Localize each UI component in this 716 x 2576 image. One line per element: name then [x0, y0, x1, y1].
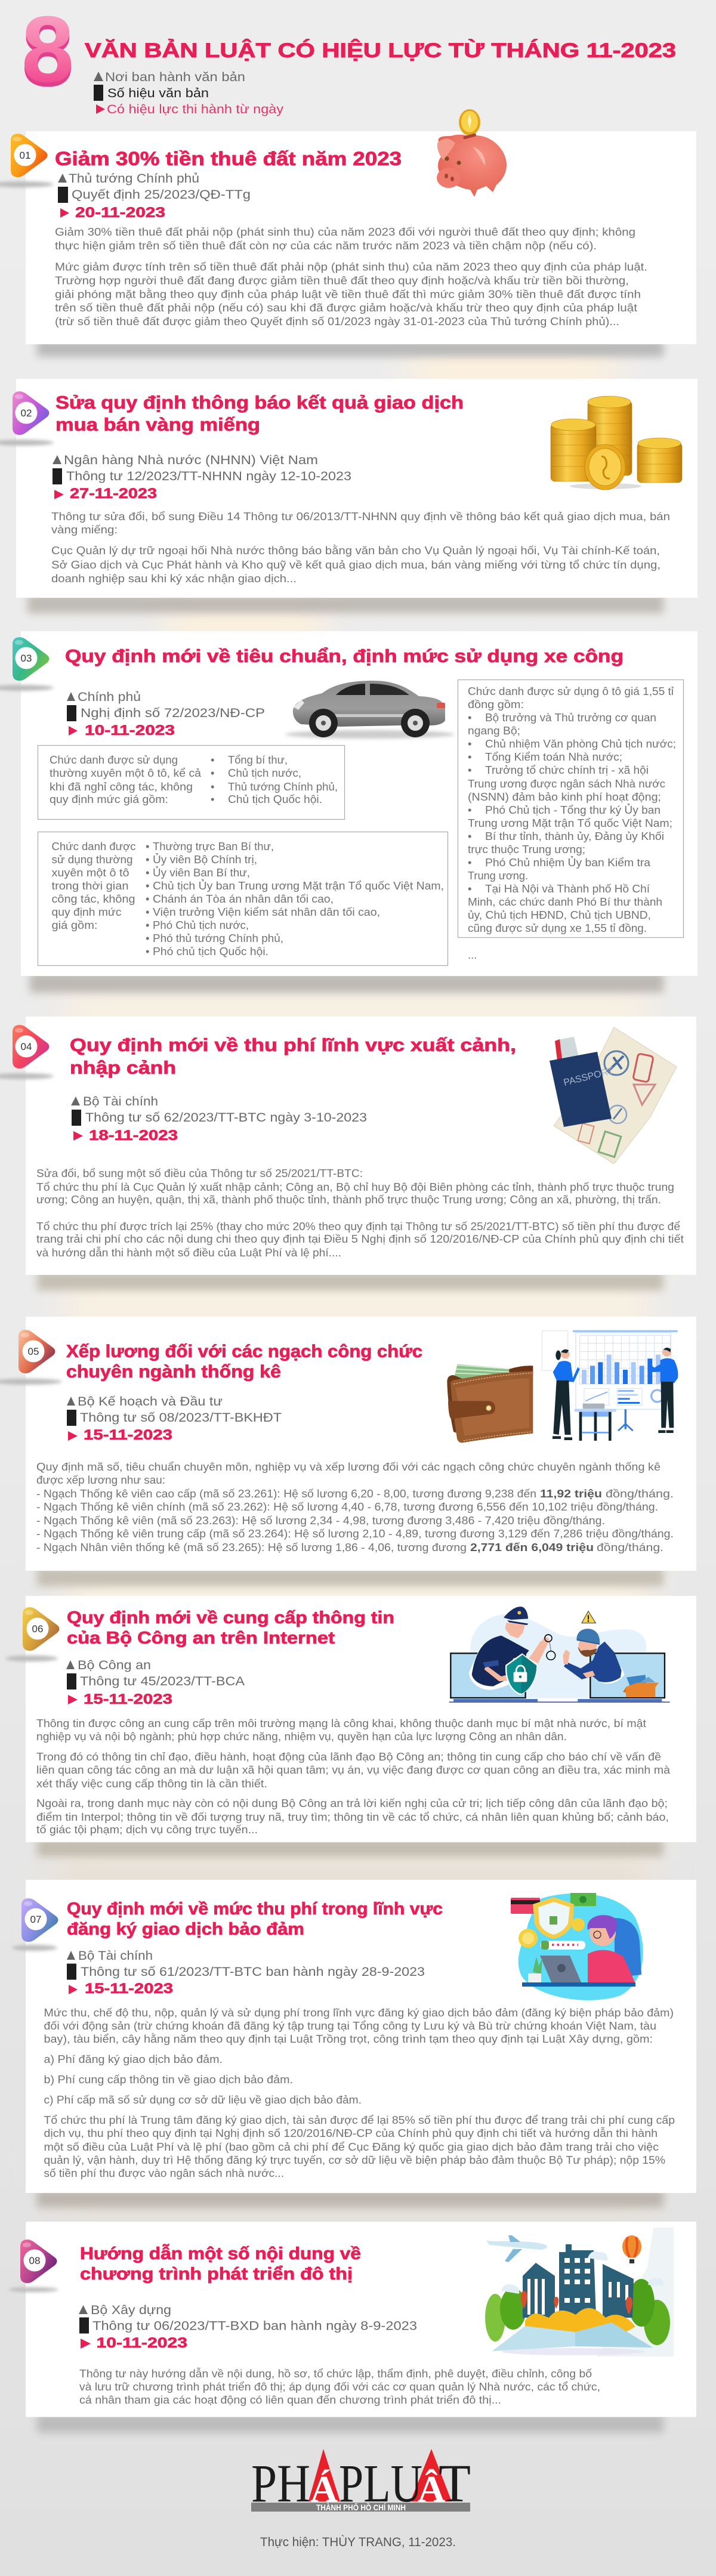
badge 03 [0, 637, 54, 691]
box: chức danh dùng xe 1,55 tỉ: Phó Chủ nhiệm Ủy ban Kiểm tra [485, 856, 651, 869]
box: chức danh không quy định mức giá: • [211, 780, 214, 793]
heading 8: Hướng dẫn một số nội dung về [80, 2243, 361, 2263]
box: chức danh dùng xe 1,55 tỉ: Bí thư tỉnh, thành ủy, Đảng ủy Khối [485, 830, 664, 842]
box: chức danh không quy định mức giá: • [211, 793, 214, 805]
badge 01 [0, 134, 54, 187]
body text 4: Tổ chức thu phí được trích lại 25% (thay cho mức 20% theo quy định tại Thông tư số 25/2021/TT-BTC) số tiền phí thu được để [36, 1221, 680, 1233]
issuer, document number, effective date: Thông tư số 62/2023/TT-BTC ngày 3-10-2023 [85, 1111, 367, 1125]
illustration: data analysts and chart board [542, 1330, 678, 1441]
heading 6: của Bộ Công an trên Internet [67, 1629, 335, 1648]
body text 1: thực hiện giảm trên số tiền thuê đất còn nợ của các năm trước năm 2023 và tiền chậm nộp (nếu có). [55, 240, 597, 252]
box: chức danh không quy định mức giá: Chủ tịch Quốc hội. [228, 793, 322, 805]
body text 4 [36, 1167, 684, 1259]
body text 2: vàng miếng: [51, 524, 118, 536]
panel 6 card [26, 1596, 696, 1842]
panel 2 card [16, 379, 698, 598]
issuer, document number, effective date [67, 690, 265, 739]
issuer, document number, effective date: 15-11-2023 [84, 1691, 172, 1707]
badge 07 [12, 1898, 58, 1951]
box: chức danh trong thời gian công tác: • [146, 932, 149, 944]
issuer, document number, effective date: Ngân hàng Nhà nước (NHNN) Việt Nam [64, 453, 318, 467]
issuer, document number, effective date: Bộ Kế hoạch và Đầu tư [78, 1395, 223, 1409]
box: chức danh trong thời gian công tác: sử dụng thường [51, 853, 132, 866]
body text 7: số tiền phí thu được vào ngân sách nhà nước... [44, 2167, 284, 2179]
icon: passport and stamped pages [550, 1027, 677, 1164]
box: chức danh trong thời gian công tác: • [146, 945, 149, 957]
legend [94, 70, 284, 116]
issuer, document number, effective date [58, 172, 251, 221]
issuer, document number, effective date [66, 1658, 245, 1707]
logo: Pháp Luật TP.HCM: PH [251, 2454, 310, 2513]
body text 1: Giảm 30% tiền thuê đất phải nộp (phát sinh thu) của năm 2023 đối với người thuê đất theo quy định; không [55, 226, 635, 238]
panel 6 shadow [37, 1839, 663, 1857]
panel 8: phát triển đô thị [8, 2222, 696, 2433]
body text 1: trên số tiền thuê đất phải nộp (nếu có) sau khi đã được giảm hoặc/và khấu trừ theo quy định của pháp luật [55, 302, 637, 314]
panel 3 shadow [30, 972, 663, 993]
issuer, document number, effective date: Nghị định số 72/2023/NĐ-CP [81, 706, 265, 720]
box: chức danh trong thời gian công tác: quy định mức [51, 906, 122, 918]
icon: passport and stamped pages: PASSPORT [563, 1066, 615, 1088]
thief [563, 1629, 659, 1697]
icon: gold coin stacks [551, 396, 682, 490]
heading 6 [67, 1608, 394, 1648]
issuer, document number, effective date: 15-11-2023 [85, 1981, 173, 1997]
body text 7 [44, 2007, 675, 2179]
heading 5: Xếp lương đối với các ngạch công chức [66, 1342, 422, 1361]
box: chức danh dùng xe 1,55 tỉ: • [468, 737, 471, 750]
woman figure [553, 1349, 580, 1440]
box: chức danh dùng xe 1,55 tỉ: (NSNN) đảm bảo kinh phí hoạt động; [468, 790, 661, 803]
body text 4: Sửa đổi, bổ sung một số điều của Thông tư số 25/2021/TT-BTC: [36, 1167, 363, 1179]
logo: Pháp Luật TP.HCM: Á [310, 2469, 338, 2510]
body text 7: c) Phí cấp mã số sử dụng cơ sở dữ liệu về giao dịch bảo đảm. [44, 2094, 362, 2106]
badge 07: 07 [30, 1914, 41, 1925]
police officer [469, 1607, 555, 1694]
issuer, document number, effective date [67, 1395, 282, 1443]
box: chức danh dùng xe 1,55 tỉ: đồng gồm: [468, 698, 524, 711]
credit line: Thực hiện: THÙY TRANG, 11-2023. [260, 2535, 456, 2549]
issuer, document number, effective date: Thông tư 45/2023/TT-BCA [80, 1675, 245, 1688]
heading 7 [67, 1899, 443, 1939]
illustration: police officer and thief on laptops [449, 1607, 670, 1703]
heading 4: nhập cảnh [70, 1057, 176, 1078]
box: chức danh không quy định mức giá: quy định mức giá gồm: [50, 793, 168, 805]
heading 7: Quy định mới về mức thu phí trong lĩnh vực [67, 1899, 443, 1919]
body text 7: b) Phí cung cấp thông tin về giao dịch bảo đảm. [44, 2074, 293, 2086]
body text 2 [51, 511, 670, 585]
box: chức danh trong thời gian công tác: Viện trưởng Viện kiểm sát nhân dân tối cao, [153, 906, 380, 918]
illustration: city on a map [485, 2228, 674, 2356]
heading 4 [70, 1034, 516, 1078]
box: chức danh không quy định mức giá: Thủ tướng Chính phủ, [228, 780, 338, 793]
body text 1 [55, 226, 647, 328]
body text 6: xét thấy việc cung cấp thông tin là cần thiết. [36, 1778, 267, 1790]
heading 2: Sửa quy định thông báo kết quả giao dịch [55, 392, 464, 413]
box: chức danh trong thời gian công tác: • [146, 906, 149, 918]
body text 7: Mức thu, chế độ thu, nộp, quản lý và sử dụng phí trong lĩnh vực đăng ký giao dịch bảo đảm (đăng ký biện pháp bảo đảm) [44, 2007, 674, 2019]
body text 6: nghiệp vụ và nội bộ ngành; phù hợp chức năng, nhiệm vụ, quyền hạn của lực lượng Công an nhân dân. [36, 1731, 567, 1743]
body text 5: đồng/tháng. [597, 1542, 663, 1553]
box: chức danh không quy định mức giá: Chủ tịch nước, [228, 767, 301, 779]
main title: VĂN BẢN LUẬT CÓ HIỆU LỰC TỪ THÁNG 11-2023 [85, 39, 676, 62]
heading 3: Quy định mới về tiêu chuẩn, định mức sử dụng xe công [65, 645, 624, 666]
heading 1: Giảm 30% tiền thuê đất năm 2023 [55, 148, 402, 169]
issuer, document number, effective date [53, 453, 351, 502]
body text 7: quản lý, vận hành, duy trì Hệ thống đăng ký trực tuyến, cơ sở dữ liệu về biện pháp bảo đảm thuộc Bộ Tư pháp); nộp 15% [44, 2154, 665, 2166]
heading 2: mua bán vàng miếng [55, 414, 260, 435]
ellipsis: ... [468, 949, 477, 961]
body text 5: - Ngạch Thống kê viên chính (mã số 23.262): Hệ số lương 4,40 - 6,78, tương đương 6,556 đến 10,102 triệu đồng/tháng. [36, 1501, 658, 1513]
body text 6: điểm tin Interpol; thông tin về đối tượng truy nã, truy tìm; thông tin về các tổ chức, cá nhân liên quan khủng bố; cảnh báo, [36, 1811, 669, 1823]
logo: Pháp Luật TP.HCM: Ậ [418, 2469, 445, 2510]
box: chức danh trong thời gian công tác [38, 832, 448, 965]
box: chức danh trong thời gian công tác: • [146, 879, 149, 892]
issuer, document number, effective date: 18-11-2023 [89, 1128, 178, 1144]
panel 7 card [26, 1880, 696, 2193]
warning sign [582, 1611, 595, 1623]
panel 4 shadow [37, 1271, 663, 1290]
issuer, document number, effective date: Thông tư số 61/2023/TT-BTC ban hành ngày 28-9-2023 [81, 1965, 425, 1979]
badge 08 [8, 2240, 58, 2292]
box: chức danh trong thời gian công tác: • [146, 866, 149, 879]
body text 5 [36, 1461, 674, 1553]
panel 3: xe công [0, 631, 698, 993]
box: chức danh dùng xe 1,55 tỉ: Minh, các chức danh Phó Bí thư thành [468, 895, 662, 908]
body text 6: Trong đó có thông tin chỉ đạo, điều hành, hoạt động của lãnh đạo Bộ Công an; thông tin cung cấp cho báo chí về vấn đề [36, 1751, 661, 1763]
body text 6: tố giác tội phạm; dịch vụ công trực tuyến... [36, 1824, 258, 1836]
panel 5 card [26, 1317, 696, 1571]
illustration: online payment security [511, 1893, 643, 2000]
issuer, document number, effective date: 20-11-2023 [75, 205, 165, 221]
box: chức danh trong thời gian công tác: Chánh án Tòa án nhân dân tối cao, [153, 892, 334, 905]
box: chức danh dùng xe 1,55 tỉ: Phó Chủ tịch - Tổng thư ký Ủy ban [485, 804, 661, 816]
box: chức danh trong thời gian công tác: Thường trực Ban Bí thư, [153, 840, 274, 853]
issuer, document number, effective date: Quyết định 25/2023/QĐ-TTg [72, 188, 251, 202]
box: chức danh trong thời gian công tác: trong thời gian [51, 879, 129, 892]
box: chức danh trong thời gian công tác: • [146, 919, 149, 931]
body text 4: trang trải chi phí cho các nội dung chi theo quy định tại Điều 5 Nghị định số 120/2016/NĐ-CP của Chính phủ quy định chi tiết [36, 1233, 684, 1245]
box: chức danh dùng xe 1,55 tỉ: • [468, 882, 471, 895]
issuer, document number, effective date: 10-11-2023 [85, 722, 175, 739]
panel 2: vàng miếng [0, 379, 698, 613]
issuer, document number, effective date: Bộ Xây dựng [91, 2303, 171, 2317]
legend: Có hiệu lực thi hành từ ngày [107, 103, 284, 116]
issuer, document number, effective date: Thông tư 12/2023/TT-NHNN ngày 12-10-2023 [66, 470, 351, 483]
panel 6: Bộ Công an [5, 1596, 696, 1857]
body text 7: a) Phí đăng ký giao dịch bảo đảm. [44, 2053, 223, 2065]
panel 2 shadow [27, 594, 663, 613]
issuer, document number, effective date: Chính phủ [78, 690, 141, 704]
body text 7: dịch vụ, thu phí theo quy định tại Nghị định số 120/2016/NĐ-CP của Chính phủ quy định chi tiết và hướng dẫn thi hành [44, 2127, 658, 2139]
badge 04: 04 [21, 1041, 32, 1052]
box: chức danh dùng xe 1,55 tỉ: Chức danh được sử dụng ô tô giá 1,55 tỉ [468, 685, 674, 697]
box: chức danh dùng xe 1,55 tỉ: • [468, 711, 471, 724]
issuer, document number, effective date: Thông tư số 08/2023/TT-BKHĐT [80, 1411, 282, 1425]
body text 5: 2,771 đến 6,049 triệu [470, 1542, 594, 1553]
heading 7: đăng ký giao dịch bảo đảm [67, 1920, 304, 1939]
box: chức danh trong thời gian công tác: xuyên một ô tô [51, 866, 129, 879]
body text 7: bay), tàu biển, cây hằng năm theo quy định tại Luật Trồng trọt, công trình tạm theo quy định tại Luật Xây dựng, gồm: [44, 2033, 653, 2045]
box: chức danh dùng xe 1,55 tỉ: Trưởng tổ chức chính trị - xã hội [485, 764, 649, 776]
heading 2 [55, 392, 464, 435]
badge 05 [0, 1330, 62, 1385]
heading 5: chuyên ngành thống kê [66, 1362, 281, 1382]
title block [21, 0, 676, 116]
man figure [649, 1348, 678, 1433]
panel 1: giảm tiền thuê đất [0, 109, 696, 357]
icon: grey car [285, 681, 455, 739]
badge 03: 03 [21, 653, 32, 664]
airplane [486, 2235, 547, 2262]
heading 6: Quy định mới về cung cấp thông tin [67, 1608, 394, 1627]
panel 8 shadow [37, 2414, 663, 2433]
issuer, document number, effective date: Bộ Công an [78, 1658, 151, 1672]
badge 01: 01 [20, 150, 30, 161]
box: chức danh không quy định mức giá: Chức danh được sử dụng [50, 753, 178, 766]
box: chức danh dùng xe 1,55 tỉ: • [468, 804, 471, 816]
panel 5: xếp lương thống kê [0, 1317, 696, 1586]
box: chức danh dùng xe 1,55 tỉ: • [468, 830, 471, 842]
body text 6 [36, 1718, 671, 1836]
badge 06 [5, 1607, 60, 1661]
badge 02: 02 [21, 407, 32, 419]
body text 8: và lưu trữ chương trình phát triển đô thị; áp dụng đối với các cơ quan quản lý Nhà nước, các tổ chức, [79, 2381, 600, 2393]
big pink number 8: 8 [21, 1, 74, 106]
box: chức danh dùng xe 1,55 tỉ: • [468, 764, 471, 776]
icon: leather wallet [447, 1364, 533, 1443]
issuer, document number, effective date: 27-11-2023 [70, 486, 157, 502]
box: chức danh không quy định mức giá [38, 746, 345, 820]
issuer, document number, effective date [67, 1949, 425, 1997]
body text 1: Trường hợp người thuê đất đang được giảm tiền thuê đất theo quy định hoặc/và khấu trừ tiền bồi thường, [55, 274, 629, 286]
issuer, document number, effective date: Bộ Tài chính [78, 1949, 153, 1963]
box: chức danh dùng xe 1,55 tỉ: ngang Bộ; [468, 724, 520, 737]
panel 5 shadow [37, 1567, 663, 1586]
issuer, document number, effective date: Thủ tướng Chính phủ [69, 172, 199, 186]
body text 7: Tổ chức thu phí là Trung tâm đăng ký giao dịch, tài sản được để lại 85% số tiền phí thu được để trang trải chi phí cung cấp [44, 2114, 675, 2126]
body text 4: Tổ chức thu phí là Cục Quản lý xuất nhập cảnh; Công an, Bộ chỉ huy Bộ đội Biên phòng các tỉnh, thành phố trực thuộc trung [36, 1181, 674, 1193]
box: chức danh dùng xe 1,55 tỉ: Trung ương. [468, 869, 528, 882]
issuer, document number, effective date [71, 1095, 367, 1144]
body text 6: liên quan công tác công an mà dư luận xã hội quan tâm; vụ án, vụ việc đang được cơ quan công an điều tra, xác minh mà [36, 1764, 671, 1776]
badge 02 [0, 391, 54, 446]
hot air balloon [622, 2235, 641, 2263]
body text 7: đối với động sản (trừ chứng khoán đã đăng ký tập trung tại Tổng công ty Lưu ký và Bù trừ chứng khoán Việt Nam, tàu [44, 2020, 656, 2032]
body text 5: đồng/tháng. [606, 1488, 674, 1500]
panel 1 card [26, 131, 696, 344]
body text 1: Mức giảm được tính trên số tiền thuê đất phải nộp (phát sinh thu) của năm 2023 theo quy định của pháp luật. [55, 261, 647, 273]
panel 3 card [21, 631, 698, 976]
box: chức danh trong thời gian công tác: Chức danh được [51, 840, 135, 853]
logo: Pháp Luật TP.HCM [251, 2449, 471, 2513]
box: chức danh không quy định mức giá: thường xuyên một ô tô, kể cả [50, 767, 202, 779]
panel 4: xuất nhập cảnh [0, 1017, 696, 1290]
heading 5 [66, 1342, 422, 1382]
box: chức danh dùng xe 1,55 tỉ: Trung ương được ngân sách Nhà nước [468, 777, 665, 790]
panel 4 card [26, 1017, 696, 1275]
legend: Số hiệu văn bản [107, 87, 209, 100]
body text 2: doanh nghiệp sau khi ký xác nhận giao dịch... [51, 573, 297, 585]
panel 8 card [26, 2222, 696, 2417]
body text 5: 11,92 triệu [540, 1488, 602, 1500]
box: chức danh không quy định mức giá: • [211, 767, 214, 779]
body text 1: (trừ số tiền thuê đất được giảm theo Quyết định số 01/2023 ngày 31-01-2023 của Thủ tướng Chính phủ)... [55, 316, 619, 328]
issuer, document number, effective date [79, 2303, 417, 2351]
box: chức danh dùng xe 1,55 tỉ [458, 680, 684, 938]
body text 5: - Ngạch Thống kê viên trung cấp (mã số 23.264): Hệ số lương 2,10 - 4,89, tương đương 3,129 đến 7,286 triệu đồng/tháng. [36, 1528, 674, 1540]
panel 7: giao dịch bảo đảm [12, 1880, 696, 2207]
body text 7: một số điều của Luật Phí và lệ phí (bao gồm cả chi phí để Cục Đăng ký quốc gia giao dịch bảo đảm trang trải cho việc [44, 2141, 659, 2153]
issuer, document number, effective date: Thông tư 06/2023/TT-BXD ban hành ngày 8-9-2023 [92, 2319, 417, 2333]
box: chức danh dùng xe 1,55 tỉ: cũng được sử dụng xe 1,55 tỉ đồng. [468, 922, 647, 934]
body text 6: Ngoài ra, trong danh mục này còn có nội dung Bộ Công an trả lời kiến nghị của cử tri; lịch tiếp công dân của lãnh đạo bộ; [36, 1797, 668, 1809]
panel 7 shadow [37, 2189, 663, 2207]
box: chức danh trong thời gian công tác: Ủy viên Bộ Chính trị, [153, 853, 257, 866]
badge 06: 06 [32, 1623, 43, 1635]
issuer, document number, effective date: Bộ Tài chính [83, 1095, 158, 1108]
box: chức danh không quy định mức giá: Tổng bí thư, [228, 753, 288, 766]
box: chức danh dùng xe 1,55 tỉ: ủy, Chủ tịch HĐND, Chủ tịch UBND, [468, 909, 651, 921]
badge 04 [0, 1025, 54, 1079]
box: chức danh dùng xe 1,55 tỉ: Bộ trưởng và Thủ trưởng cơ quan [485, 711, 656, 724]
box: chức danh trong thời gian công tác: • [146, 853, 149, 866]
body text 5: - Ngạch Nhân viên thống kê (mã số 23.265): Hệ số lương 1,86 - 4,06, tương đương [36, 1542, 467, 1553]
body text 8: cá nhân tham gia các hoạt động có liên quan đến chương trình phát triển đô thị... [79, 2394, 501, 2406]
heading 8 [80, 2243, 361, 2284]
body text 2: Sở Giao dịch và Cục Phát hành và Kho quỹ về kết quả giao dịch mua, bán vàng miếng với từng tổ chức tín dụng, [51, 559, 661, 571]
box: chức danh dùng xe 1,55 tỉ: Trung ương Mặt trận Tổ quốc Việt Nam; [468, 817, 672, 829]
body text 5: - Ngạch Thống kê viên cao cấp (mã số 23.261): Hệ số lương 6,20 - 8,00, tương đương 9,238 đến [36, 1488, 536, 1500]
panel 1 shadow [37, 340, 663, 357]
body text 8 [79, 2367, 600, 2406]
body text 2: Cục Quản lý dự trữ ngoại hối Nhà nước thông báo bằng văn bản cho Vụ Quản lý ngoại hối, Vụ Tài chính-Kế toán, [51, 544, 660, 557]
box: chức danh không quy định mức giá: • [211, 753, 214, 766]
box: chức danh không quy định mức giá: khi đã nghỉ công tác, không [50, 780, 193, 793]
logo: Pháp Luật TP.HCM: THÀNH PHỐ HỒ CHÍ MINH [316, 2502, 406, 2512]
badge 05: 05 [28, 1346, 39, 1357]
logo: Pháp Luật TP.HCM: T [439, 2454, 471, 2513]
box: chức danh trong thời gian công tác: giá gồm: [51, 919, 98, 931]
body text 8: Thông tư này hướng dẫn về nội dung, hồ sơ, tổ chức lập, thẩm định, phê duyệt, điều chỉnh, công bố [79, 2367, 592, 2380]
badge 08: 08 [29, 2255, 40, 2266]
box: chức danh trong thời gian công tác: Phó Chủ tịch nước, [153, 919, 249, 931]
box: chức danh trong thời gian công tác: Phó chủ tịch Quốc hội. [153, 945, 268, 957]
body text 5: - Ngạch Thống kê viên (mã số 23.263): Hệ số lương 2,34 - 4,98, tương đương 3,486 - 7,420 triệu đồng/tháng. [36, 1515, 605, 1527]
box: chức danh dùng xe 1,55 tỉ: Tại Hà Nội và Thành phố Hồ Chí [485, 882, 650, 895]
issuer, document number, effective date: 10-11-2023 [97, 2335, 187, 2351]
body text 5: Quy định mã số, tiêu chuẩn chuyên môn, nghiệp vụ và xếp lương đối với các ngạch công chức chuyên ngành thống kê [36, 1461, 661, 1473]
body text 4: và hướng dẫn thi hành một số điều của Luật Phí và lệ phí.... [36, 1246, 341, 1259]
box: chức danh trong thời gian công tác: Chủ tịch Ủy ban Trung ương Mặt trận Tổ quốc Việt Nam, [153, 879, 444, 892]
body text 2: Thông tư sửa đổi, bổ sung Điều 14 Thông tư 06/2013/TT-NHNN quy định về thông báo kết quả giao dịch mua, bán [51, 511, 670, 523]
box: chức danh trong thời gian công tác: công tác, không [51, 892, 135, 905]
box: chức danh dùng xe 1,55 tỉ: • [468, 856, 471, 869]
icon: piggy bank [437, 109, 507, 197]
body text 4: ương; Công an huyện, quận, thị xã, thành phố thuộc tỉnh, thành phố trực thuộc Trung ương; Công an xã, phường, thị trấn. [36, 1194, 661, 1206]
issuer, document number, effective date: 15-11-2023 [84, 1427, 172, 1443]
heading 8: chương trình phát triển đô thị [80, 2265, 353, 2284]
box: chức danh trong thời gian công tác: • [146, 840, 149, 853]
legend: Nơi ban hành văn bản [105, 70, 245, 84]
heading 4: Quy định mới về thu phí lĩnh vực xuất cảnh, [70, 1034, 516, 1055]
big pink number 8: 8 [21, 0, 74, 102]
box: chức danh dùng xe 1,55 tỉ: trực thuộc Trung ương; [468, 843, 585, 855]
body text 1: giải phóng mặt bằng theo quy định của pháp luật về tiền thuê đất thì mức giảm 30% tiền thuê đất được tính [55, 288, 641, 301]
box: chức danh dùng xe 1,55 tỉ: • [468, 750, 471, 763]
logo: Pháp Luật TP.HCM: PLU [339, 2454, 422, 2513]
body text 5: được xếp lương như sau: [36, 1474, 165, 1486]
box: chức danh dùng xe 1,55 tỉ: Chủ nhiệm Văn phòng Chủ tịch nước; [485, 737, 676, 750]
box: chức danh trong thời gian công tác: Ủy viên Ban Bí thư, [153, 866, 250, 879]
box: chức danh trong thời gian công tác: • [146, 892, 149, 905]
box: chức danh dùng xe 1,55 tỉ: Tổng Kiểm toán Nhà nước; [485, 750, 622, 763]
body text 6: Thông tin được công an cung cấp trên môi trường mạng là công khai, không thuộc danh mục bí mật nhà nước, bí mật [36, 1718, 646, 1729]
box: chức danh trong thời gian công tác: Phó thủ tướng Chính phủ, [153, 932, 283, 944]
